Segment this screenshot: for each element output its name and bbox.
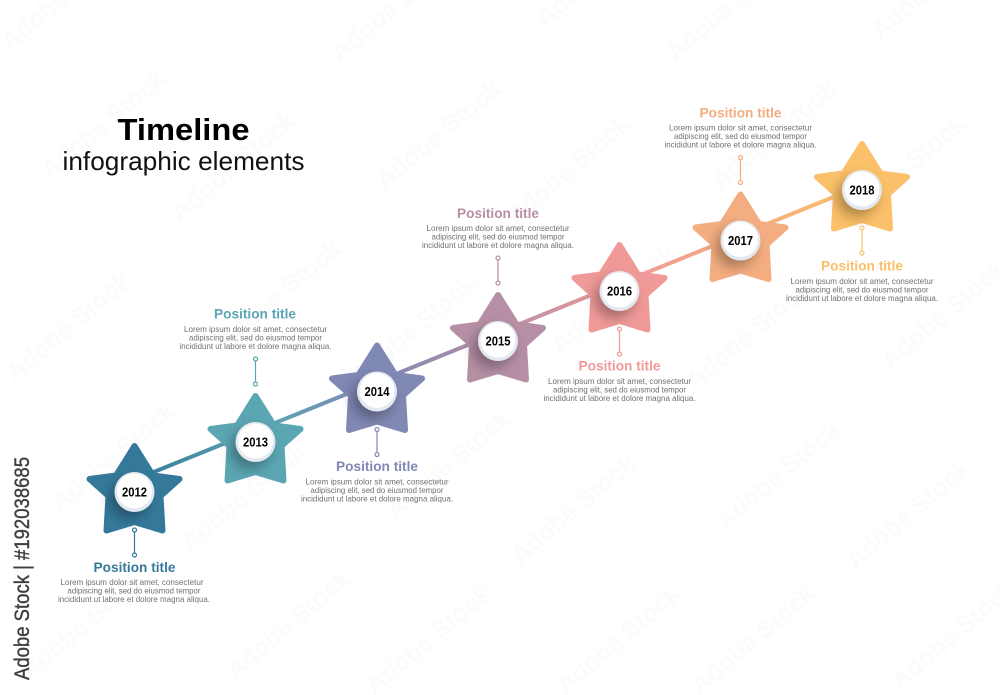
connector 2016 — [618, 327, 622, 356]
year badge 2018 — [842, 170, 882, 210]
watermark pattern: Adobe Stock — [36, 65, 171, 185]
timeline line — [134, 186, 862, 480]
star 2014 — [332, 346, 422, 430]
label 2015: Lorem ipsum dolor sit amet, consectetur — [426, 223, 570, 233]
milestone 2014 — [301, 346, 453, 504]
label 2015: incididunt ut labore et dolore magna aliqua. — [422, 240, 574, 250]
title: Timeline — [118, 112, 250, 147]
label 2014 — [301, 458, 453, 504]
label 2018: Position title — [821, 258, 903, 274]
connector 2017 — [738, 156, 742, 184]
year badge 2013 — [236, 422, 276, 462]
label 2013: incididunt ut labore et dolore magna aliqua. — [180, 341, 332, 351]
label 2016: incididunt ut labore et dolore magna aliqua. — [544, 393, 696, 403]
milestone 2016 — [544, 245, 696, 403]
label 2012 — [58, 559, 210, 604]
side credit text: Adobe Stock | #192038685 — [11, 457, 34, 680]
year badge 2014 — [357, 372, 397, 412]
label 2017: Lorem ipsum dolor sit amet, consectetur — [669, 122, 812, 132]
watermark pattern: Adobe Stock — [16, 565, 151, 685]
year badge 2016: 2016 — [607, 284, 632, 298]
watermark pattern: Adobe Stock — [506, 450, 641, 570]
label 2016: Lorem ipsum dolor sit amet, consectetur — [548, 376, 691, 386]
star 2016 — [574, 245, 664, 330]
label 2016: adipiscing elit, sed do eiusmod tempor — [553, 384, 686, 394]
star 2015 — [453, 295, 543, 380]
label 2012: adipiscing elit, sed do eiusmod tempor — [68, 586, 201, 596]
year badge 2013: 2013 — [243, 436, 268, 450]
watermark pattern: Adobe Stock — [221, 565, 356, 685]
year badge 2012: 2012 — [122, 486, 147, 500]
star 2013 — [210, 396, 300, 480]
label 2012: incididunt ut labore et dolore magna aliqua. — [58, 594, 210, 604]
title: infographic elements — [62, 146, 304, 176]
label 2018: adipiscing elit, sed do eiusmod tempor — [796, 284, 929, 294]
year badge 2012 — [114, 472, 154, 512]
connector 2015 — [496, 256, 500, 285]
label 2015 — [422, 205, 574, 250]
label 2014: incididunt ut labore et dolore magna aliqua. — [301, 494, 453, 504]
watermark pattern: Adobe Stock — [166, 107, 301, 227]
year badge 2017: 2017 — [728, 234, 753, 248]
watermark pattern: Adobe Stock — [1, 267, 136, 387]
year badge 2016 — [600, 271, 640, 311]
watermark pattern: Adobe Stock — [46, 397, 181, 517]
connector 2013 — [254, 357, 258, 386]
year badge 2018: 2018 — [850, 184, 875, 198]
watermark pattern: Adobe Stock — [346, 270, 481, 390]
star 2017 — [696, 194, 786, 279]
label 2013: Lorem ipsum dolor sit amet, consectetur — [184, 324, 327, 334]
connector 2012 — [132, 528, 136, 557]
watermark pattern: Adobe Stock — [176, 437, 311, 557]
milestone 2017 — [664, 104, 816, 279]
label 2018 — [786, 258, 938, 303]
connector 2014 — [375, 428, 379, 456]
star 2012 — [90, 446, 180, 530]
connector 2018 — [860, 226, 864, 255]
year badge 2015 — [478, 321, 518, 361]
label 2014: Position title — [336, 458, 418, 474]
watermark pattern: Adobe Stock — [681, 275, 816, 395]
label 2017: adipiscing elit, sed do eiusmod tempor — [674, 131, 807, 141]
watermark pattern: Adobe Stock — [841, 455, 976, 575]
label 2015: Position title — [457, 205, 539, 221]
milestone 2012 — [58, 446, 210, 604]
label 2018: Lorem ipsum dolor sit amet, consectetur — [790, 276, 934, 286]
label 2014: adipiscing elit, sed do eiusmod tempor — [310, 485, 444, 495]
watermark pattern: Adobe Stock — [706, 75, 841, 195]
label 2018: incididunt ut labore et dolore magna aliqua. — [786, 293, 938, 303]
label 2017: Position title — [700, 104, 782, 120]
milestone 2018 — [786, 144, 938, 303]
watermark pattern: Adobe Stock — [371, 75, 506, 195]
year badge 2015: 2015 — [486, 334, 511, 348]
label 2017: incididunt ut labore et dolore magna aliqua. — [664, 140, 816, 150]
year badge 2014: 2014 — [364, 385, 390, 399]
label 2016: Position title — [578, 358, 661, 374]
label 2013: adipiscing elit, sed do eiusmod tempor — [189, 332, 322, 342]
watermark pattern: Adobe Stock — [711, 415, 846, 535]
label 2014: Lorem ipsum dolor sit amet, consectetur — [306, 476, 449, 486]
milestone 2013 — [180, 306, 332, 480]
watermark pattern: Adobe Stock — [381, 405, 516, 525]
watermark pattern: Adobe Stock — [836, 110, 971, 230]
label 2013 — [180, 306, 332, 351]
watermark pattern: Adobe Stock — [501, 110, 636, 230]
label 2015: adipiscing elit, sed do eiusmod tempor — [432, 232, 565, 242]
label 2017 — [664, 104, 816, 150]
watermark pattern: Adobe Stock — [546, 240, 681, 360]
star 2018 — [817, 144, 907, 228]
label 2016 — [544, 358, 696, 403]
label 2013: Position title — [214, 306, 296, 322]
label 2012: Position title — [94, 559, 176, 575]
watermark pattern: Adobe Stock — [211, 235, 346, 355]
label 2012: Lorem ipsum dolor sit amet, consectetur — [60, 577, 204, 587]
title — [62, 112, 304, 176]
milestone 2015 — [422, 205, 574, 380]
year badge 2017 — [720, 220, 760, 260]
